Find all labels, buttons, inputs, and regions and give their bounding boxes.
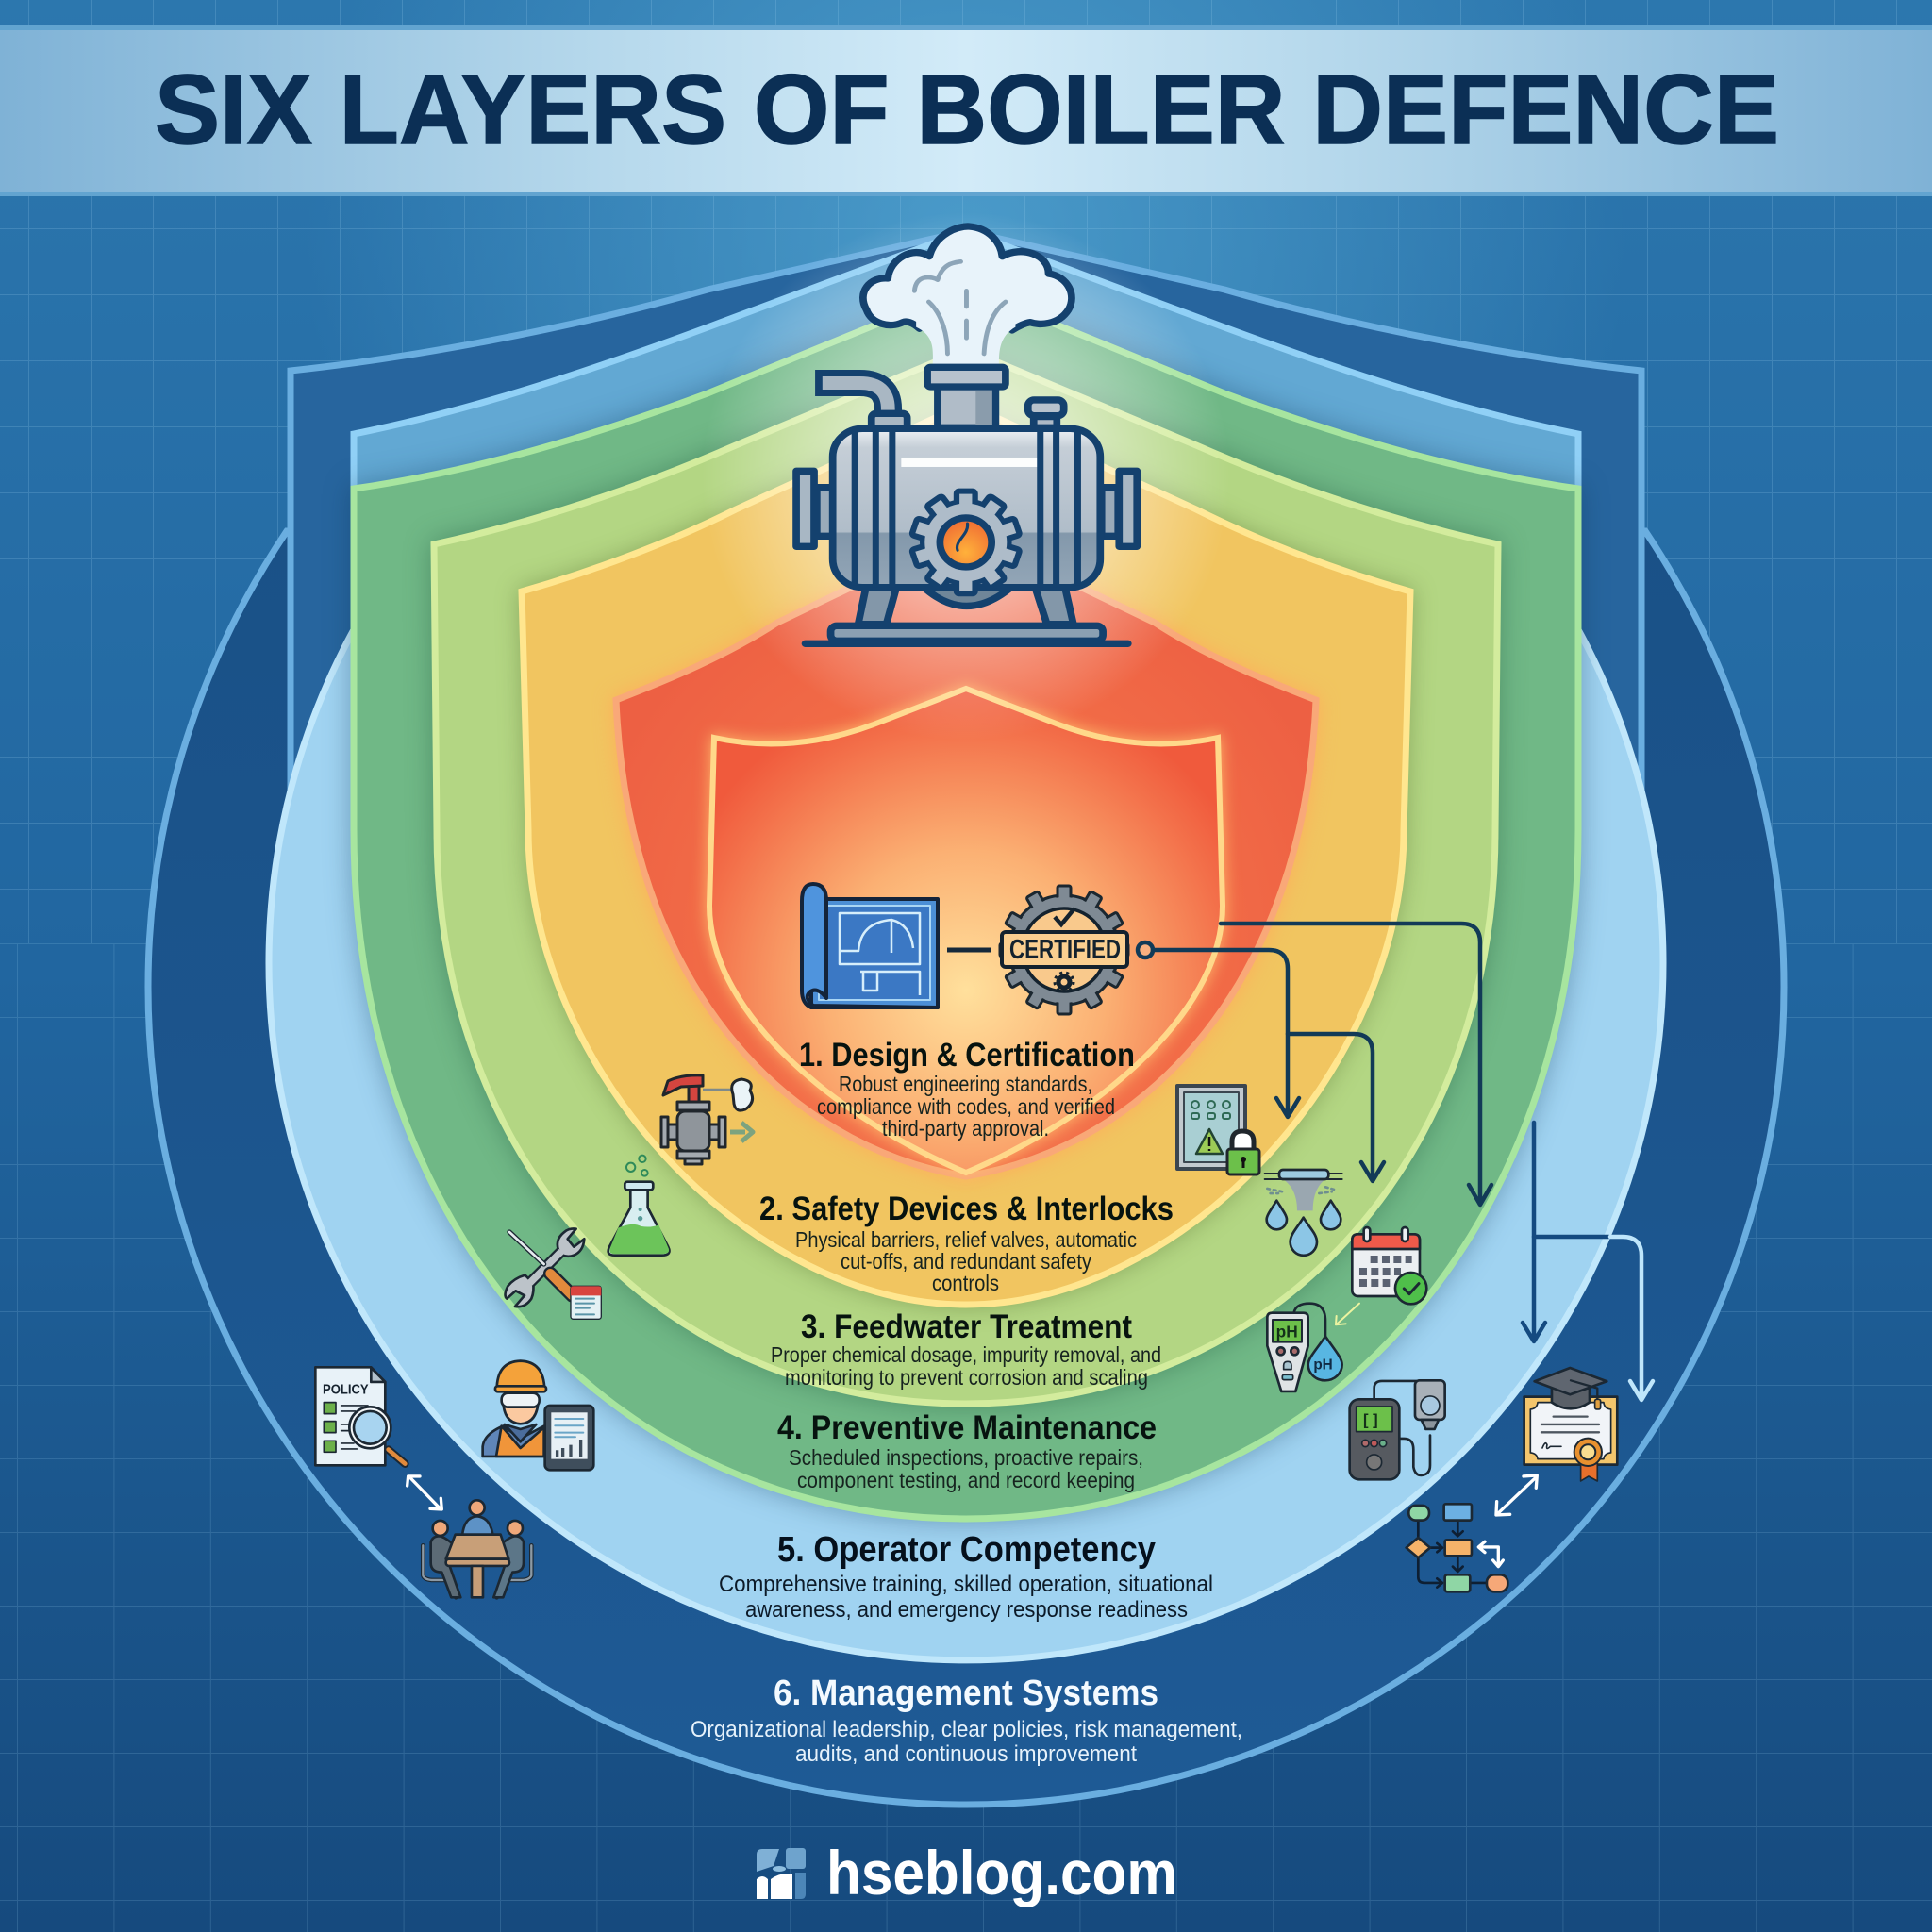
certified label: CERTIFIED: [1009, 935, 1121, 965]
layer 2 shield: safety devices: [522, 404, 1410, 1305]
safety valve cap: [1028, 400, 1064, 427]
website name: hseblog.com: [826, 1838, 1177, 1907]
description: feedwater treatment: Proper chemical dosage, impurity removal, and: [771, 1342, 1161, 1367]
title banner: [0, 25, 1932, 196]
left side icons: [315, 1156, 670, 1597]
description: design and certification: [817, 1072, 1115, 1141]
description: management systems: [691, 1717, 1242, 1767]
description: operator competency: [719, 1572, 1213, 1623]
icon: operator with tablet: [483, 1361, 593, 1470]
layer 1 inner shield: [709, 689, 1223, 1173]
arrows from certified gear: [1138, 924, 1653, 1400]
icon: certified gear: [1000, 886, 1128, 1014]
heading: management systems: 6. Management Systems: [774, 1674, 1158, 1713]
icon: process flowchart: [1407, 1504, 1507, 1591]
lower gear bowl: [923, 587, 1012, 606]
description: feedwater treatment: [771, 1342, 1161, 1390]
description: safety devices: [795, 1227, 1137, 1295]
icon: wrench and screwdriver with calendar: [506, 1228, 601, 1319]
layer 4 text: [777, 1409, 1157, 1492]
icon: flask: [608, 1156, 670, 1256]
icon: water spray and drops: [1265, 1170, 1342, 1256]
icon: ph meter with drop: [1267, 1304, 1342, 1391]
description: feedwater treatment: monitoring to prevent corrosion and scaling: [785, 1365, 1148, 1390]
description: safety devices: controls: [932, 1271, 999, 1295]
arrow: policy to meeting: [408, 1476, 441, 1509]
heading: feedwater treatment: 3. Feedwater Treatment: [801, 1308, 1132, 1345]
footer logo: [757, 1838, 1177, 1907]
layer 3 shield: feedwater treatment: [434, 349, 1498, 1404]
legs: [858, 588, 1074, 625]
gauge display: [ ]: [1363, 1411, 1378, 1429]
icon: management meeting: [423, 1500, 531, 1597]
description: preventive maintenance: component testing, and record keeping: [797, 1468, 1135, 1492]
icon: boiler with steam: [796, 226, 1137, 643]
ph label on meter: pH: [1276, 1322, 1298, 1341]
icon: certificate with graduation cap: [1524, 1368, 1617, 1481]
left pipe: [815, 383, 908, 429]
heading: operator competency: 5. Operator Competency: [777, 1530, 1156, 1570]
layer 6 text: [691, 1674, 1242, 1767]
layer 3 text: [771, 1308, 1161, 1390]
description: safety devices: Physical barriers, relief valves, automatic: [795, 1227, 1137, 1252]
description: design and certification: third-party approval.: [882, 1116, 1049, 1141]
icon: relief valve: [661, 1075, 753, 1164]
description: preventive maintenance: Scheduled inspections, proactive repairs,: [789, 1445, 1143, 1470]
icon: blueprint: [802, 884, 938, 1008]
layer 5 text: [719, 1530, 1213, 1623]
layer 1 text: [799, 1037, 1135, 1141]
layer 6 shield: [291, 231, 1641, 811]
description: operator competency: awareness, and emergency response readiness: [745, 1597, 1188, 1623]
description: design and certification: compliance with codes, and verified: [817, 1094, 1115, 1119]
icon: calendar with check: [1352, 1227, 1426, 1304]
layer 4 shield: preventive maintenance: [354, 288, 1578, 1519]
title: SIX LAYERS OF BOILER DEFENCE: [155, 55, 1779, 165]
layer 6 circle: management systems: [148, 531, 1784, 1805]
description: safety devices: cut-offs, and redundant safety: [841, 1249, 1091, 1274]
layer 5 circle: operator competency: [269, 625, 1663, 1660]
icon: handheld gauge with probe: [1350, 1380, 1445, 1479]
policy label: POLICY: [323, 1382, 369, 1397]
heading: preventive maintenance: 4. Preventive Maintenance: [777, 1409, 1157, 1446]
arrow: calendar to ph meter: [1336, 1304, 1359, 1324]
description: management systems: audits, and continuous improvement: [795, 1741, 1137, 1767]
icon: hseblog mark: [757, 1848, 806, 1899]
side flanges: [796, 471, 1137, 546]
layer 5 shield band: [354, 231, 1578, 679]
heading: safety devices and interlocks: 2. Safety Devices & Interlocks: [759, 1191, 1174, 1227]
base: [806, 625, 1128, 643]
layer 1 outer shield: [616, 532, 1316, 1176]
heading: design and certification: 1. Design & Certification: [799, 1037, 1135, 1074]
connector between blueprint and certificate: [947, 947, 991, 953]
arrow: certificate to flowchart: [1496, 1475, 1537, 1515]
gear with flame: [911, 491, 1020, 593]
ph label on drop: pH: [1313, 1357, 1333, 1374]
layer 2 text: [759, 1191, 1174, 1295]
chimney: [927, 367, 1006, 427]
tank: [833, 428, 1100, 588]
description: operator competency: Comprehensive training, skilled operation, situational: [719, 1572, 1213, 1597]
right side icons: [1265, 1170, 1617, 1591]
steam cloud: [863, 226, 1072, 366]
description: design and certification: Robust engineering standards,: [839, 1072, 1092, 1096]
icon: control panel with lock: [1177, 1086, 1259, 1174]
icon: policy document: [315, 1367, 405, 1465]
description: preventive maintenance: [789, 1445, 1143, 1492]
description: management systems: Organizational leadership, clear policies, risk management,: [691, 1717, 1242, 1742]
boiler glow: [702, 212, 1230, 741]
